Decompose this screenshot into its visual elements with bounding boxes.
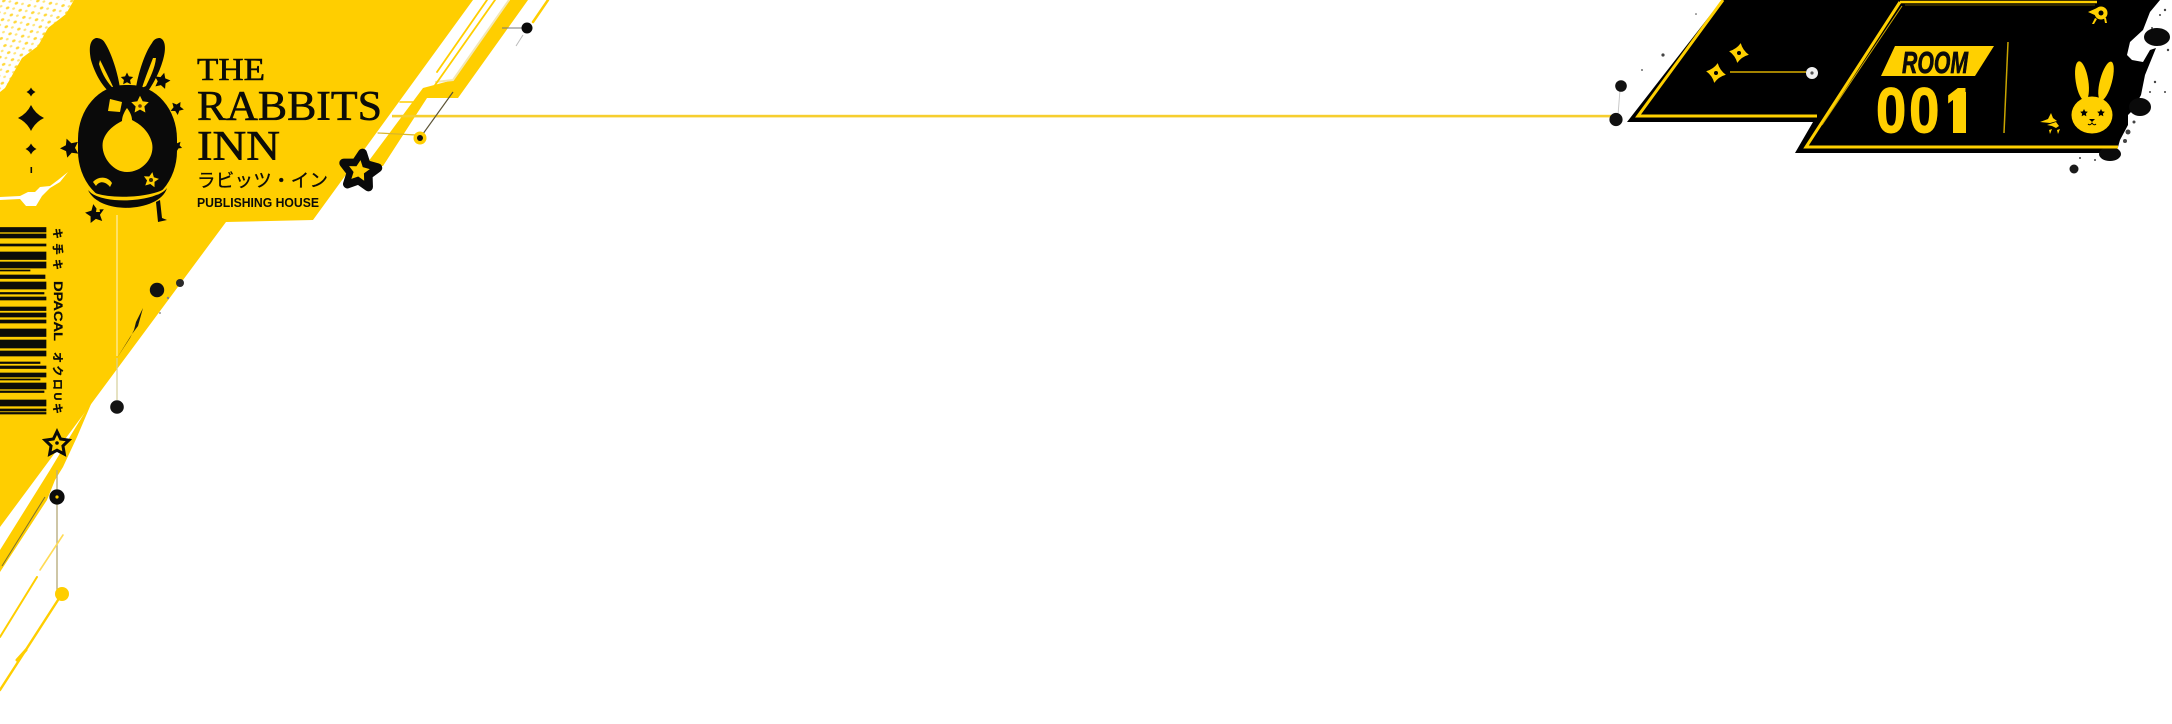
title: The Rabbits Inn: INN [197,124,280,170]
long horizontal yellow rule [392,115,1612,117]
room tag [1881,45,1994,80]
pale inner strip edge [435,0,509,82]
panel: black room panels [1627,0,2170,174]
title: The Rabbits Inn: THE [197,51,265,87]
wreath ring [78,85,177,205]
barcode vertical code text: キ 手 キ [51,228,65,270]
panel trim: yellow outlines [1638,0,2118,147]
white crack in yellow [0,172,68,206]
lower diagonal yellow strokes [0,535,63,690]
barcode vertical code text: DPACAL [51,281,63,341]
dark thin line in lower strip [2,497,45,566]
room label: ROOM [1902,45,1969,80]
icon: sparkle pair with line [1704,41,1818,85]
barcode vertical code text [51,228,65,414]
icon: glitch star [2040,113,2060,134]
lower yellow strip [0,358,117,572]
panel: yellow corner banner [0,0,528,572]
thin pale vertical line with node [110,215,124,414]
title: The Rabbits Inn [197,51,382,210]
room number: 0 [1876,74,1906,147]
room number: 0 [1909,74,1939,147]
icon: left sparkle column [18,88,44,173]
left ear [90,38,120,94]
icon: emblem top right [2088,6,2108,24]
node: yellow ring dot with diagonal line [414,92,453,144]
icon: outline star [45,432,69,454]
nodes at rule end [1609,80,1627,126]
subtitle: katakana: ラビッツ・イン [197,170,328,191]
title: The Rabbits Inn: RABBITS [197,84,382,130]
wreath hole [103,108,152,172]
black crack on yellow edge [117,279,184,358]
flowers [108,99,122,112]
subtitle: publishing house: PUBLISHING HOUSE [197,195,319,210]
node line with black and yellow dots [49,470,69,601]
leaves [121,72,133,84]
speckled white wear top-left [0,0,74,92]
logo: rabbit wreath [58,38,186,224]
node: top black dot with line [502,22,532,46]
ink blobs [2144,28,2170,46]
icon: yellow rabbit head [2072,60,2117,134]
belt crescent [88,188,167,208]
thin yellow diagonal lines top [378,0,548,135]
barcode vertical code text: オクロUキ [51,352,64,414]
barcode [0,228,46,414]
feet [156,200,167,222]
right ear [136,38,165,94]
room number [1876,74,1980,147]
icon: large black star [341,151,379,188]
upper right yellow strip [365,0,528,166]
room number: 1 [1945,74,1975,147]
